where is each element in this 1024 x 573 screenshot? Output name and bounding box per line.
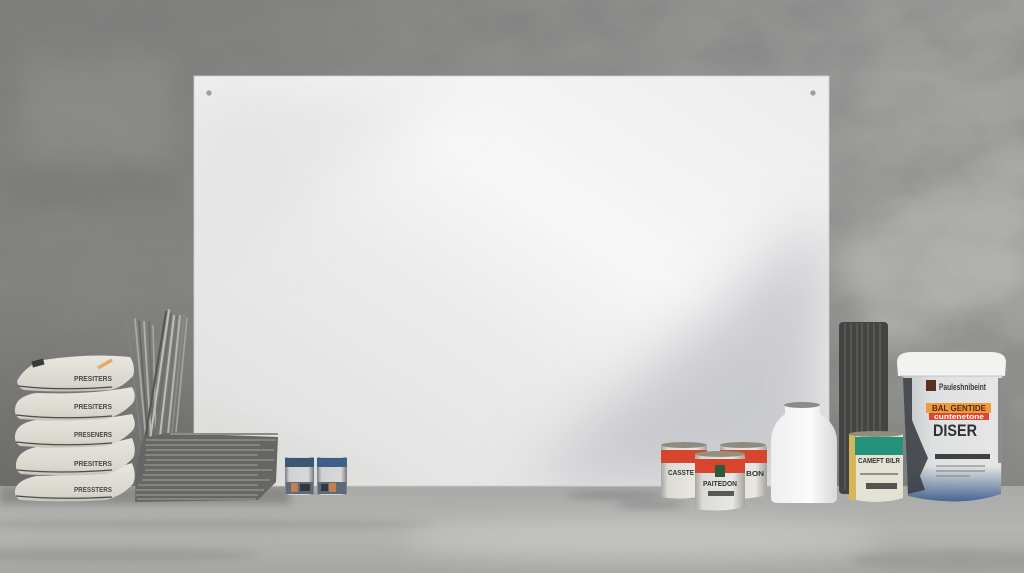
large paint pail with label <box>897 352 1006 502</box>
bag label: PRESSTERS <box>74 485 112 494</box>
stack of flat metal sheets <box>135 433 278 502</box>
bag label: PRESITERS <box>74 459 112 468</box>
bundle of steel rods <box>127 310 187 470</box>
two small blue paint tins <box>285 457 347 495</box>
bag 3 <box>15 414 135 448</box>
tin right <box>317 457 347 495</box>
can back left: CASSTE <box>668 470 694 477</box>
stack of cement bags <box>15 356 135 502</box>
tin left <box>285 457 314 495</box>
can front: PAITEDON <box>703 481 737 488</box>
green-labelled paint can <box>849 431 903 502</box>
band text: BAL GENTIDE <box>932 404 987 413</box>
bag label: PRESITERS <box>74 374 112 383</box>
red label band <box>929 413 989 420</box>
pail logo and brand name: Pauleshnibeint <box>939 382 986 392</box>
pail main word: DISER <box>933 421 977 440</box>
band text second line: cuntenetone <box>934 414 984 421</box>
board mounting screw left <box>206 90 212 96</box>
can back right: BON <box>746 471 764 478</box>
dark ribbed rolled material <box>839 322 888 494</box>
pail info bar <box>935 454 990 459</box>
blank white display board <box>194 76 829 486</box>
bag 5 (bottom) <box>15 463 135 502</box>
bag label: PRESITERS <box>74 402 112 411</box>
white plastic jar <box>771 402 837 503</box>
orange label band <box>926 403 991 413</box>
pail logo and brand name <box>926 380 986 392</box>
bag 1 (top) <box>17 356 134 392</box>
polished concrete floor <box>0 486 1024 573</box>
can label text: CAMEFT BILR <box>858 456 900 465</box>
bag 4 <box>16 438 135 476</box>
board mounting screw right <box>810 90 816 96</box>
group of three red-labelled paint cans <box>661 442 767 511</box>
bag 2 <box>15 387 135 420</box>
bag label: PRESENERS <box>74 430 112 439</box>
